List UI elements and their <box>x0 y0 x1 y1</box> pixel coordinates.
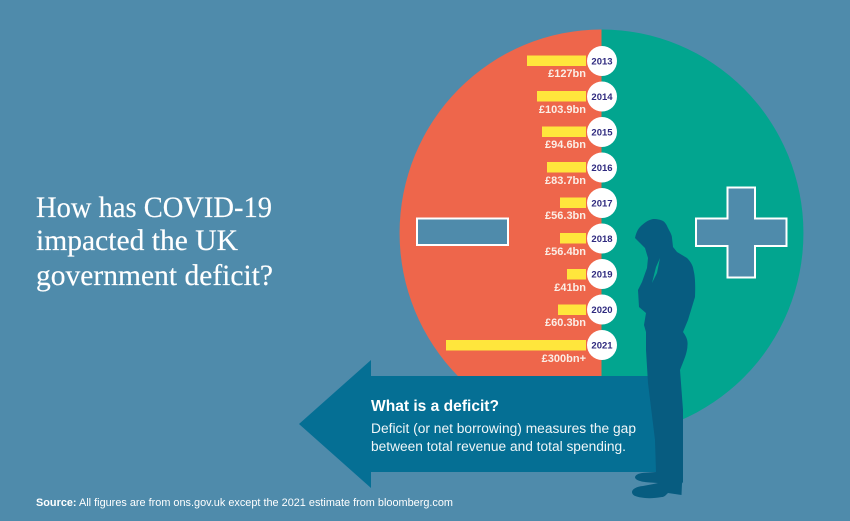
bar 2020 <box>545 294 617 329</box>
bar 2017: 2017 <box>591 198 613 210</box>
source note: Source: All figures are from ons.gov.uk except the 2021 estimate from bloomberg.com <box>36 497 453 509</box>
bar 2013: £127bn <box>548 68 586 80</box>
title: How has COVID-19 <box>36 191 272 224</box>
bar 2021 <box>446 330 617 365</box>
plus half of circle <box>602 30 803 436</box>
bar chart: deficit by year <box>446 46 617 365</box>
bar 2015: 2015 <box>591 128 613 138</box>
bar 2020: £60.3bn <box>545 317 586 329</box>
title: government deficit? <box>36 259 273 292</box>
title: impacted the UK <box>36 224 238 257</box>
bar 2016: £83.7bn <box>545 175 586 187</box>
arrow body text: between total revenue and total spending. <box>371 439 626 454</box>
bar 2021: 2021 <box>591 340 613 352</box>
bar 2018: 2018 <box>591 234 613 245</box>
bar 2017 <box>545 188 617 222</box>
bar 2021: £300bn+ <box>542 353 586 365</box>
bar 2014 <box>537 82 617 116</box>
icon: minus sign <box>417 218 508 245</box>
arrow body text <box>371 421 636 454</box>
bar 2014: £103.9bn <box>539 104 586 116</box>
bar 2016: 2016 <box>591 163 613 174</box>
title <box>36 191 273 292</box>
icon: plus sign <box>696 188 786 278</box>
bar 2018 <box>545 224 617 258</box>
bar 2015: £94.6bn <box>545 139 586 151</box>
minus half of circle <box>400 30 602 436</box>
figure: thinking man silhouette <box>632 219 695 498</box>
bar 2019: £41bn <box>554 282 586 294</box>
bar 2014: 2014 <box>591 92 613 103</box>
bar 2019 <box>554 259 617 294</box>
bar 2018: £56.4bn <box>545 246 586 258</box>
bar 2020: 2020 <box>591 305 613 316</box>
bar 2017: £56.3bn <box>545 210 586 222</box>
panel: split circle <box>400 30 803 436</box>
arrow body text: Deficit (or net borrowing) measures the gap <box>371 421 636 436</box>
bar 2013 <box>527 46 617 80</box>
bar 2019: 2019 <box>591 270 613 280</box>
bar 2015 <box>542 117 617 151</box>
arrow heading: What is a deficit? <box>371 398 499 415</box>
arrow: what is a deficit <box>299 360 660 488</box>
bar 2013: 2013 <box>591 56 613 68</box>
bar 2016 <box>545 152 617 187</box>
